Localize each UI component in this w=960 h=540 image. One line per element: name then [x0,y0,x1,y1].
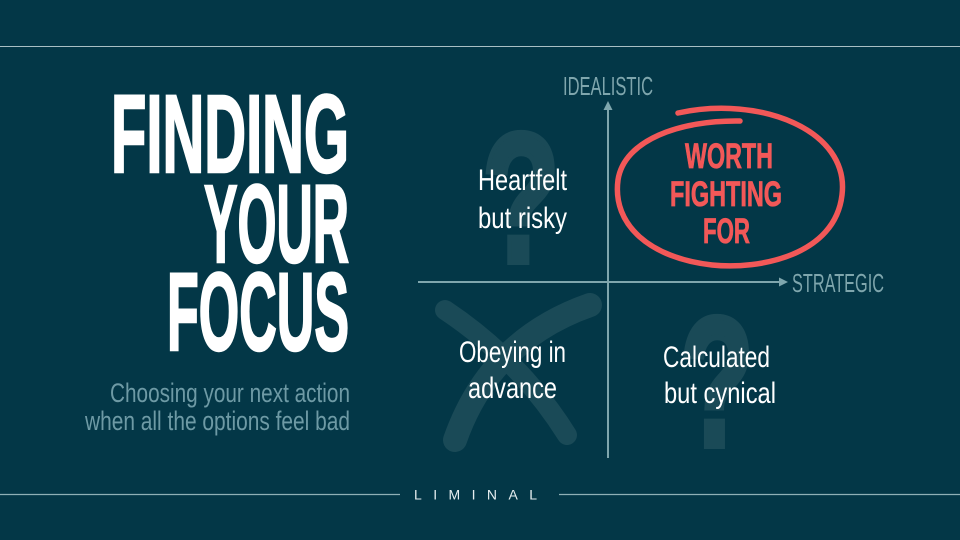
axis label: strategic: STRATEGIC [792,268,884,298]
icon: ghost question mark upper left: ? [482,96,560,302]
chart axes [418,101,788,458]
callout: worth fighting for circled: FIGHTING [670,175,782,214]
title: FINDING [111,73,349,196]
logo: LIMINAL: LIMINAL [414,486,537,502]
icon: ghost X mark [445,305,590,440]
quadrant: calculated but cynical [663,341,776,410]
callout: worth fighting for circled [617,108,842,266]
quadrant: obeying in advance: Obeying in [459,336,566,369]
axis label: idealistic: IDEALISTIC [563,71,653,101]
quadrant: heartfelt but risky: Heartfelt [478,164,568,197]
title [111,73,349,374]
quadrant: heartfelt but risky [478,164,568,235]
subtitle: Choosing your next action [110,378,350,408]
icon: ghost question mark lower right: ? [680,280,754,486]
subtitle [84,378,350,436]
callout: worth fighting for circled: WORTH [685,137,773,176]
quadrant: heartfelt but risky: but risky [478,202,567,235]
subtitle: when all the options feel bad [84,406,350,436]
quadrant: obeying in advance [459,336,566,405]
text: FOCUS [167,251,349,374]
quadrant: calculated but cynical: but cynical [664,377,776,410]
text: YOUR [204,163,349,286]
callout: worth fighting for circled: FOR [703,212,750,251]
quadrant: calculated but cynical: Calculated [663,341,770,374]
quadrant: obeying in advance: advance [468,372,557,405]
